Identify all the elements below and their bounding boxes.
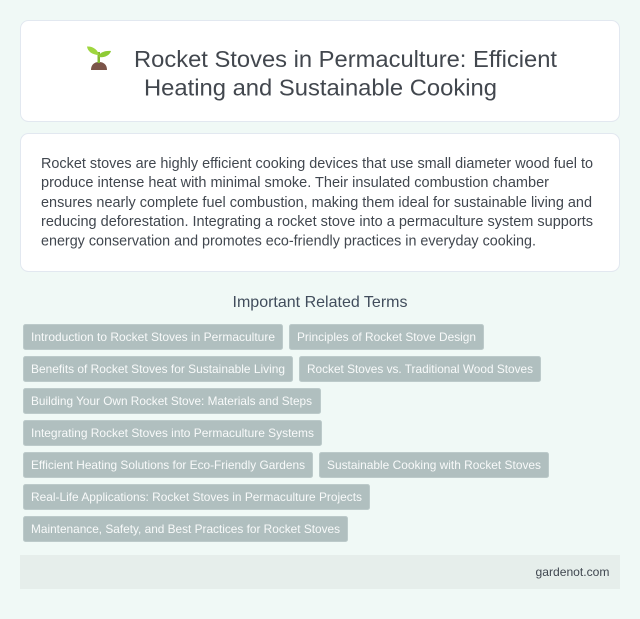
tag [24,452,312,478]
tag [24,420,322,446]
tag group: related terms [24,324,548,542]
heading: related terms: Important Related Terms [232,294,408,311]
description text: reducing deforestation. Integrating a rocket stove into a permaculture system supports [41,214,593,230]
tag [24,324,282,350]
tag [320,452,548,478]
title: Rocket Stoves in Permaculture: Efficient [134,46,557,72]
footer [20,555,620,589]
header panel [20,20,620,122]
description text: Rocket stoves are highly efficient cooking devices that use small diameter wood fuel to [41,156,593,172]
tag [24,388,320,414]
tag [24,356,292,382]
panel: description [20,134,620,272]
icon: sprout [87,46,111,70]
tag [24,484,370,510]
tag: Sustainable Cooking with Rocket Stoves [327,458,541,472]
tag [290,324,484,350]
tag: Efficient Heating Solutions for Eco-Friendly Gardens [31,458,305,472]
tag: Integrating Rocket Stoves into Permaculture Systems [31,426,314,440]
footer: gardenot.com [536,565,610,579]
description text: energy conservation and promotes eco-friendly practices in everyday cooking. [41,234,536,250]
tag [24,516,348,542]
description text [41,156,593,250]
description text: produce intense heat with minimal smoke. Their insulated combustion chamber [41,175,549,191]
tag: Principles of Rocket Stove Design [297,330,476,344]
tag: Real-Life Applications: Rocket Stoves in Permaculture Projects [31,490,362,504]
title: Heating and Sustainable Cooking [144,74,497,100]
tag: Rocket Stoves vs. Traditional Wood Stoves [307,362,533,376]
tag: Building Your Own Rocket Stove: Materials and Steps [31,394,312,408]
tag: Maintenance, Safety, and Best Practices for Rocket Stoves [31,522,340,536]
tag: Benefits of Rocket Stoves for Sustainable Living [31,362,285,376]
description text: ensures nearly complete fuel combustion, making them ideal for sustainable living and [41,195,592,211]
tag [300,356,540,382]
tag: Introduction to Rocket Stoves in Permaculture [31,330,275,344]
title [134,46,557,100]
